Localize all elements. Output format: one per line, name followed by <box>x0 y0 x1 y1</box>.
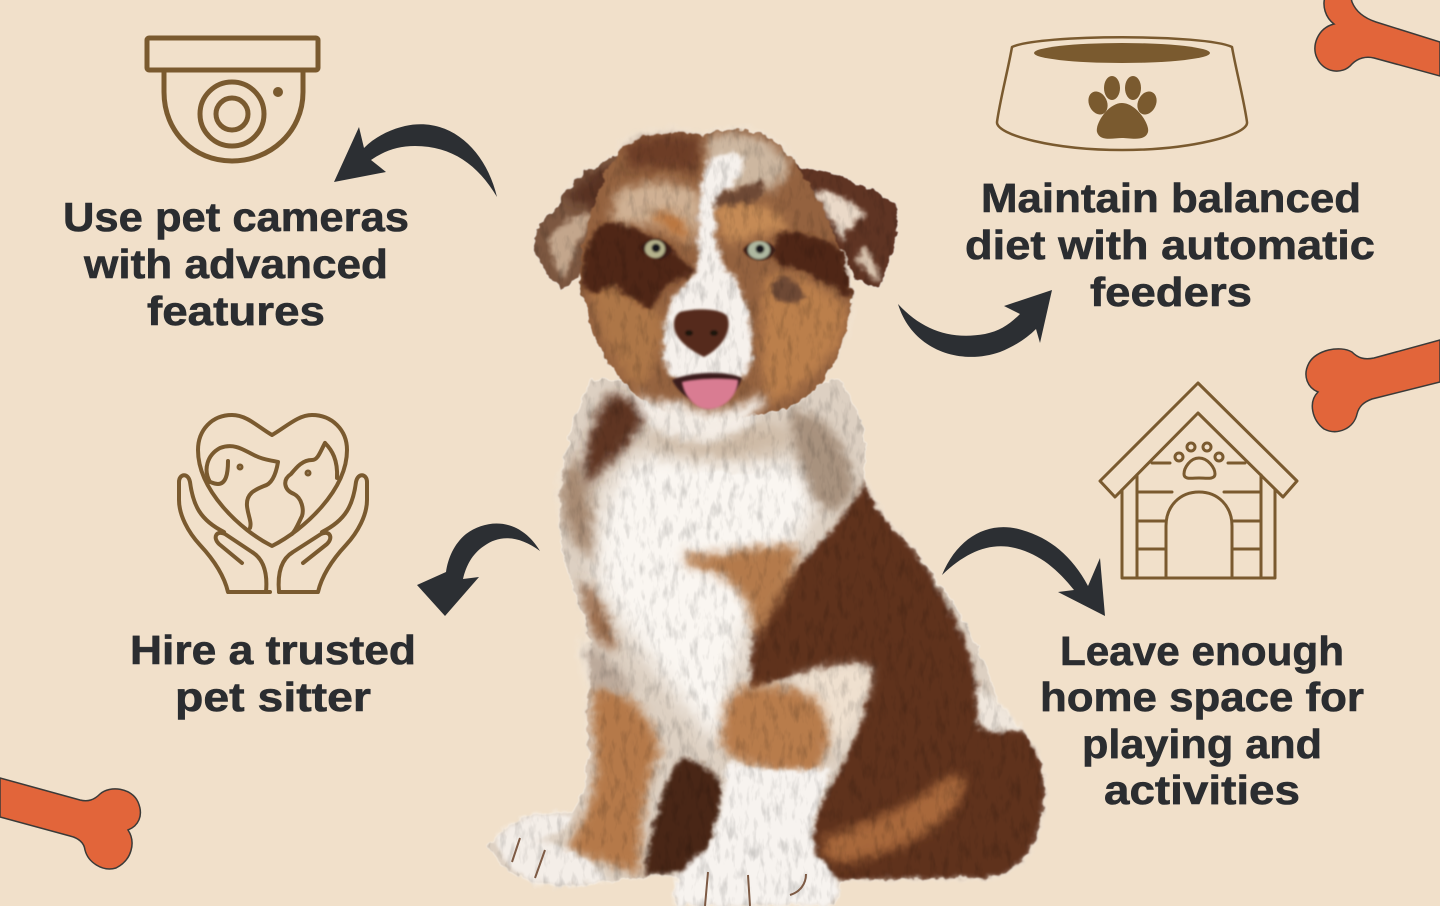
icon: food bowl with paw <box>997 37 1247 150</box>
bone: bottom left <box>0 778 140 869</box>
right eye <box>743 241 776 260</box>
left brow tan <box>650 211 690 240</box>
left flank <box>562 455 598 560</box>
icon: dog house <box>1100 383 1297 578</box>
right ear <box>790 165 898 288</box>
bone: right <box>1306 340 1440 432</box>
caption: home space <box>1040 628 1364 813</box>
caption: balanced diet <box>965 175 1375 315</box>
arrow: to camera <box>334 124 497 197</box>
upper chest mottling <box>640 425 800 461</box>
right brow tan <box>712 201 790 245</box>
left ear light <box>548 212 596 278</box>
grey left elbow <box>580 640 635 692</box>
puppy paw toes <box>512 838 806 906</box>
right ear light <box>812 191 865 240</box>
left ear dark top <box>566 165 628 225</box>
right neck mottling <box>790 410 855 511</box>
dark eye patches <box>582 224 696 310</box>
caption: pet sitter: pet sitter <box>175 674 371 720</box>
caption: home space: Leave enough <box>1060 628 1344 674</box>
chest white <box>596 449 825 750</box>
caption: balanced diet: feeders <box>1090 269 1252 315</box>
puppy body <box>488 380 1044 906</box>
arrow: to dog house <box>942 527 1105 616</box>
tongue <box>682 379 738 409</box>
illustration: puppy <box>488 129 1044 906</box>
bone: top right <box>1315 0 1440 76</box>
arrow: to bowl <box>898 290 1052 357</box>
caption: pet cameras: with advanced <box>83 241 388 287</box>
caption: home space: activities <box>1104 767 1300 813</box>
cream right shoulder <box>790 666 872 750</box>
brown speckles <box>716 178 805 303</box>
top-right pale hair <box>705 132 790 191</box>
right cheek <box>761 275 848 402</box>
white left paw <box>495 813 610 886</box>
caption: pet cameras: features <box>147 288 325 334</box>
top-left hair <box>622 134 703 172</box>
nose <box>674 309 729 357</box>
icon: security camera <box>147 38 318 161</box>
under shadow <box>645 759 722 875</box>
puppy head fur <box>534 129 898 441</box>
tan right foreleg <box>722 686 835 775</box>
tan tail fur <box>822 776 963 863</box>
caption: pet cameras: Use pet cameras <box>63 194 409 240</box>
caption: balanced diet: Maintain balanced <box>981 175 1361 221</box>
arrow: to pet sitter <box>417 524 540 616</box>
head fur base <box>580 129 851 419</box>
caption: pet sitter <box>130 627 416 720</box>
caption: pet cameras <box>63 194 409 334</box>
white blaze <box>663 153 753 383</box>
white rear patch <box>976 686 1022 732</box>
puppy face <box>640 239 776 409</box>
caption: home space: home space for <box>1040 674 1364 720</box>
brown flank <box>580 580 618 650</box>
icon: paw print <box>1085 76 1160 139</box>
icon: hands holding heart with pets <box>179 415 367 592</box>
brown rear <box>750 480 1044 880</box>
white foreleg <box>675 762 838 906</box>
mouth <box>672 373 742 404</box>
caption: balanced diet: diet with automatic <box>965 222 1375 268</box>
tan chest marks <box>685 545 800 640</box>
left shoulder shading <box>584 394 645 490</box>
caption: pet sitter: Hire a trusted <box>130 627 416 673</box>
left eye <box>640 239 672 259</box>
left cheek <box>590 286 665 390</box>
tan left foreleg <box>566 680 660 875</box>
left brow pale <box>612 182 701 245</box>
caption: home space: playing and <box>1082 721 1322 767</box>
left ear <box>534 150 640 290</box>
chin white <box>632 395 765 441</box>
